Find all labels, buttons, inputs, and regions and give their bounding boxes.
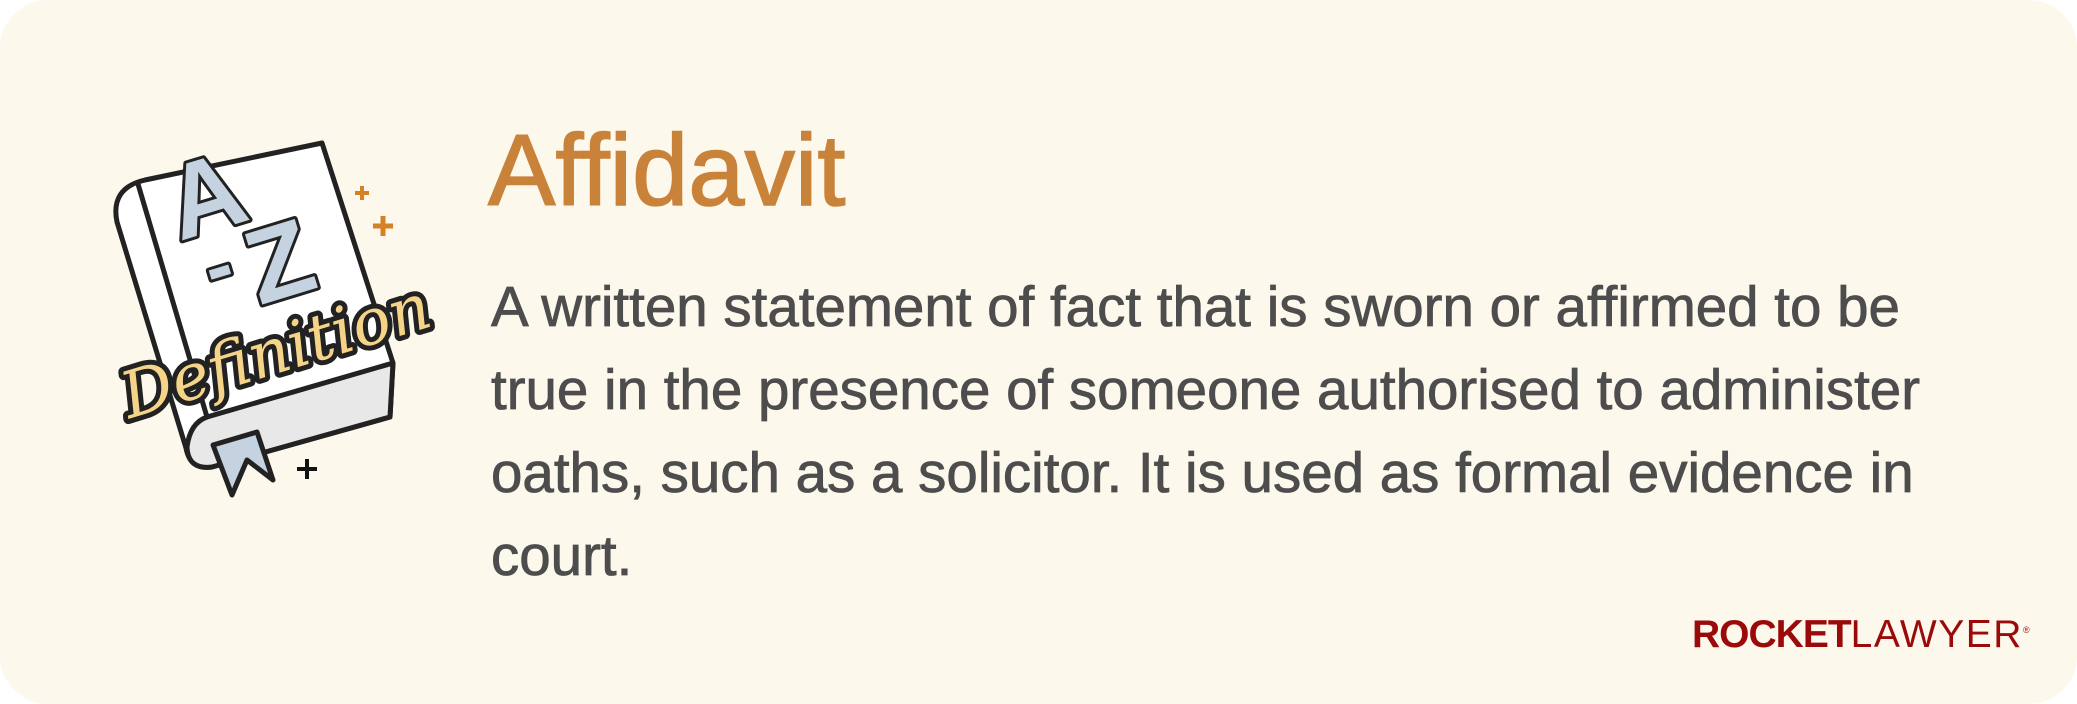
icon: A-Z definition book: Z (232, 197, 327, 327)
title: Affidavit (488, 115, 845, 227)
icon: A-Z definition book: - (192, 219, 244, 312)
icon: A-Z definition book: A (152, 129, 259, 263)
text block: definition: true in the presence of someone authorised to administer (491, 358, 1920, 421)
icon: A-Z definition book: Definition (111, 270, 439, 434)
logo: Rocket Lawyer: ROCKETLAWYER® (1692, 613, 2030, 656)
text block: definition: A written statement of fact that is sworn or affirmed to be (491, 275, 1900, 338)
text block: definition: oaths, such as a solicitor. It is used as formal evidence in (491, 441, 1914, 504)
text block: definition (490, 275, 1920, 587)
icon: A-Z definition book (111, 129, 439, 498)
text block: definition: court. (491, 524, 632, 587)
